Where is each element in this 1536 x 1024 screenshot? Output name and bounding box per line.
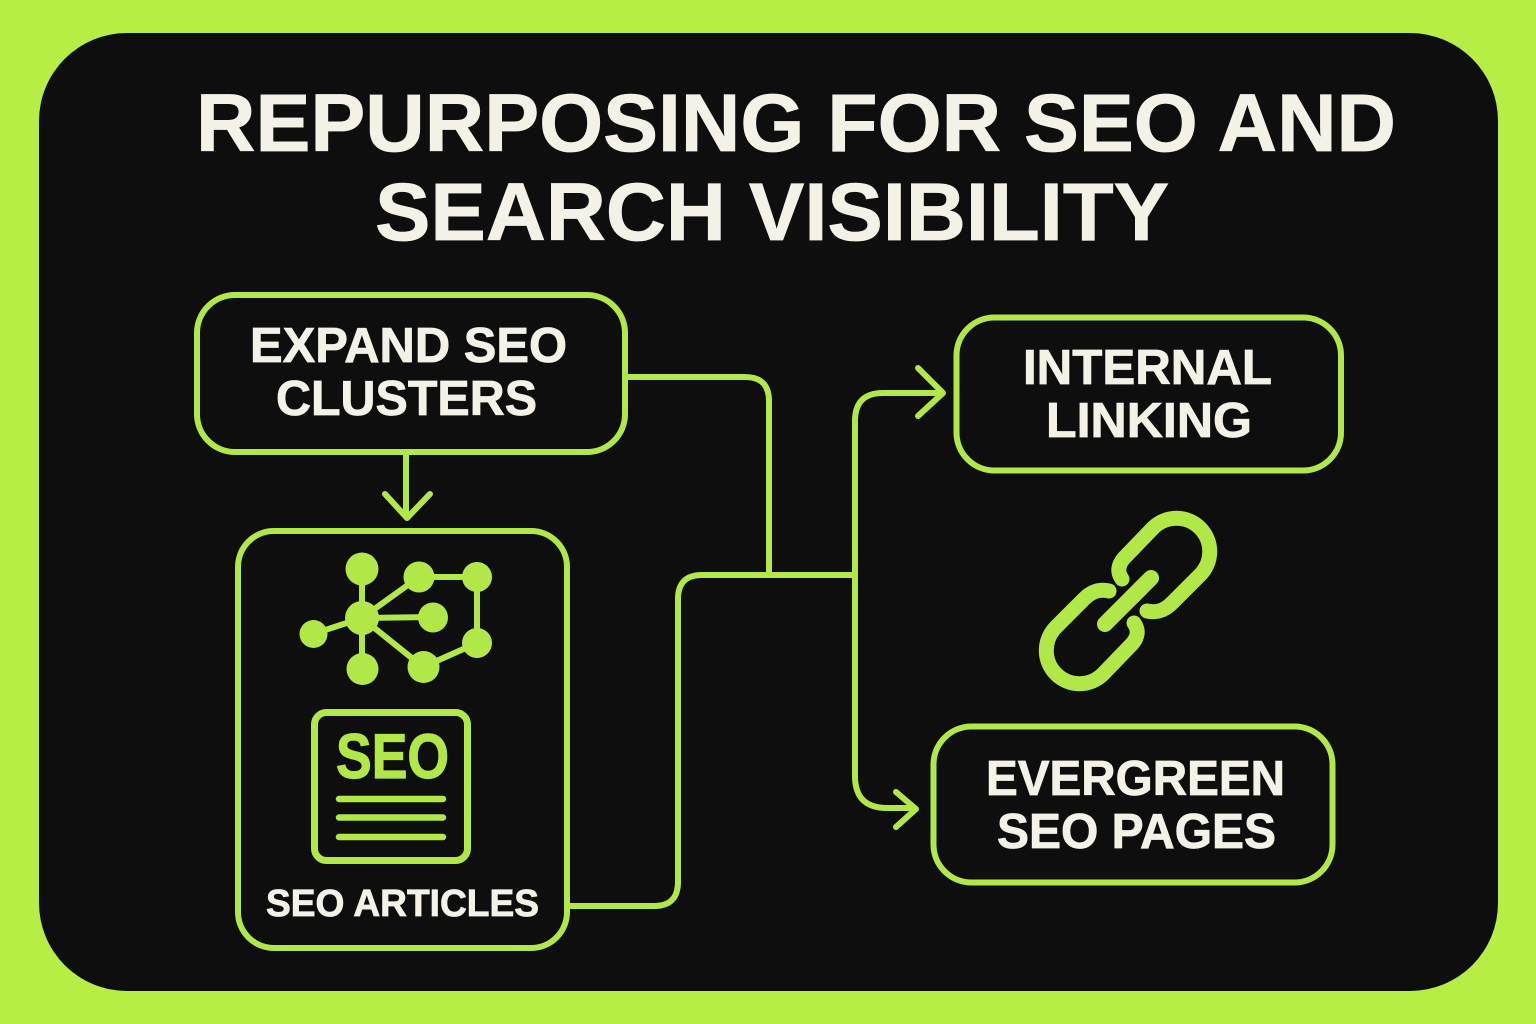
- arrow: expand clusters to SEO articles: [385, 452, 430, 518]
- icon: cluster network: [300, 552, 492, 685]
- title: SEARCH VISIBILITY: [375, 167, 1169, 258]
- icon: SEO document: SEO: [336, 722, 449, 792]
- label: evergreen SEO pages: SEO PAGES: [997, 805, 1276, 859]
- label: expand SEO clusters: EXPAND SEO: [250, 319, 567, 373]
- label: evergreen SEO pages: [986, 752, 1285, 859]
- panel: SEO articles: [238, 531, 567, 948]
- panel: internal linking: [956, 318, 1341, 470]
- arrow: junction to internal linking: [855, 368, 943, 575]
- title: [196, 78, 1396, 258]
- label: internal linking: LINKING: [1046, 394, 1252, 448]
- title: REPURPOSING FOR SEO AND: [196, 78, 1396, 169]
- icon: chain link: [1046, 518, 1210, 684]
- label: SEO articles: SEO ARTICLES: [266, 883, 539, 925]
- connector: expand box to junction: [626, 377, 769, 575]
- label: expand SEO clusters: CLUSTERS: [276, 372, 537, 426]
- panel: expand SEO clusters: [197, 295, 625, 452]
- label: internal linking: [1023, 341, 1272, 448]
- arrow: junction to evergreen pages: [855, 575, 916, 827]
- connector: SEO articles to junction: [567, 575, 855, 906]
- label: evergreen SEO pages: EVERGREEN: [986, 752, 1285, 806]
- label: expand SEO clusters: [250, 319, 567, 426]
- icon: SEO document: [314, 712, 468, 860]
- panel: evergreen SEO pages: [934, 726, 1332, 882]
- label: internal linking: INTERNAL: [1023, 341, 1272, 395]
